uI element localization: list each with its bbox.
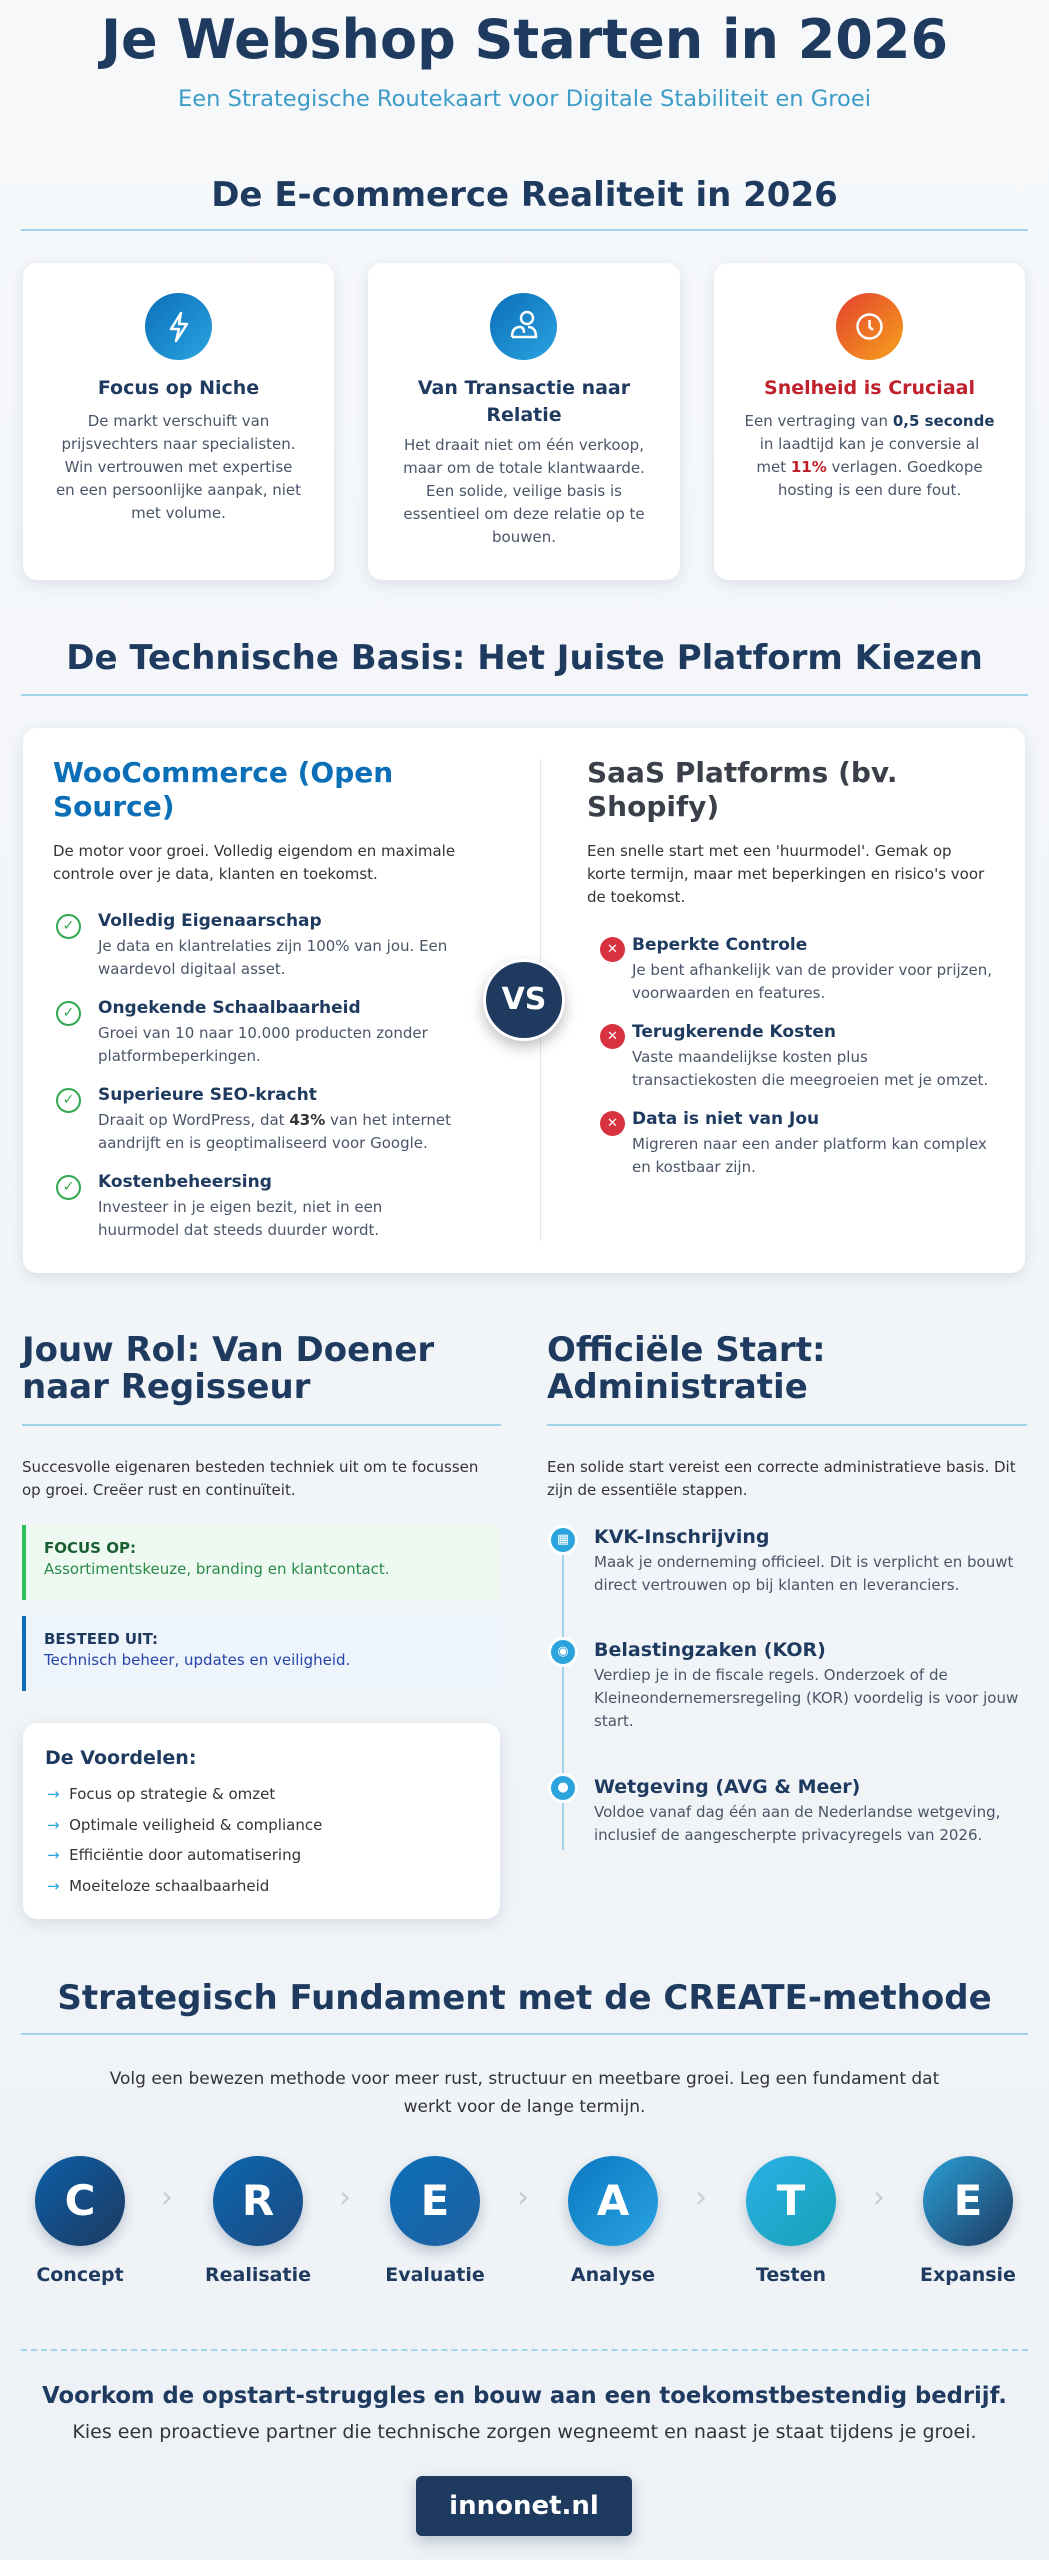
create steps: C	[65, 2176, 95, 2225]
create steps: R	[242, 2176, 274, 2225]
card: focus op niche	[23, 263, 334, 580]
timeline: Maak je onderneming officieel. Dit is verplicht en bouwt direct vertrouwen op bij klanten en leveranciers.	[594, 1553, 1013, 1594]
con items: Data is niet van Jou	[632, 1109, 819, 1129]
create steps: Analyse	[571, 2264, 655, 2286]
pro items: Kostenbeheersing	[98, 1172, 272, 1192]
vs badge: VS	[502, 982, 546, 1017]
box: besteed uit	[22, 1616, 501, 1691]
icon: clock	[836, 293, 903, 360]
timeline: KVK-Inschrijving	[594, 1526, 770, 1548]
card: voordelen: → Moeiteloze schaalbaarheid	[47, 1876, 269, 1894]
saas desc: korte termijn, maar met beperkingen en risico's voor	[587, 865, 984, 883]
create steps: ›	[161, 2180, 173, 2215]
create steps: Expansie	[920, 2264, 1016, 2286]
card text: Het draait niet om één verkoop, maar om de totale klantwaarde. Een solide, veilige basis is essentieel om deze relatie op te bouwen.	[403, 436, 645, 546]
title: Je Webshop Starten in 2026	[101, 8, 948, 71]
card: voordelen: De Voordelen:	[45, 1747, 196, 1769]
pro items: Draait op WordPress, dat 43% van het internet aandrijft en is geoptimaliseerd voor Google.	[98, 1111, 451, 1152]
vs badge	[483, 959, 565, 1041]
admin desc: Een solide start vereist een correcte administratieve basis. Dit zijn de essentiële stappen.	[547, 1458, 1016, 1499]
pro items: ✓	[63, 1092, 74, 1108]
heading: e-commerce realiteit: De E-commerce Realiteit in 2026	[211, 175, 838, 215]
create steps: ›	[339, 2180, 351, 2215]
pro items: Superieure SEO-kracht	[98, 1085, 317, 1105]
saas desc: Een snelle start met een 'huurmodel'. Gemak op	[587, 842, 952, 860]
pro items: Investeer in je eigen bezit, niet in een huurmodel dat steeds duurder wordt.	[98, 1198, 382, 1239]
create steps: ›	[873, 2180, 885, 2215]
pro items: Ongekende Schaalbaarheid	[98, 998, 361, 1018]
card: transactie naar relatie	[368, 263, 680, 580]
timeline: Belastingzaken (KOR)	[594, 1639, 826, 1661]
woocommerce desc: De motor voor groei. Volledig eigendom en maximale controle over je data, klanten en toekomst.	[53, 842, 455, 883]
cta heading: Voorkom de opstart-struggles en bouw aan een toekomstbestendig bedrijf.	[42, 2383, 1007, 2409]
box: besteed uit: Technisch beheer, updates en veiligheid.	[44, 1651, 350, 1669]
con items: ✕	[607, 1029, 618, 1044]
create steps: A	[597, 2176, 629, 2225]
saas desc: de toekomst.	[587, 888, 685, 906]
heading: officiële start: Officiële Start: Administratie	[547, 1330, 826, 1407]
cta text: Kies een proactieve partner die technische zorgen wegneemt en naast je staat tijdens je groei.	[72, 2421, 977, 2443]
create steps: Evaluatie	[385, 2264, 485, 2286]
timeline	[548, 1525, 1018, 1850]
card text: hosting is een dure fout.	[778, 481, 961, 499]
card: voordelen	[23, 1723, 500, 1919]
heading: technische basis: De Technische Basis: Het Juiste Platform Kiezen	[66, 638, 983, 678]
timeline: Verdiep je in de fiscale regels. Onderzoek of de Kleineondernemersregeling (KOR) voordelig is voor jouw start.	[594, 1666, 1018, 1730]
box: focus op	[22, 1525, 501, 1600]
create steps: E	[954, 2176, 982, 2225]
create steps: E	[421, 2176, 449, 2225]
subtitle: Een Strategische Routekaart voor Digitale Stabiliteit en Groei	[178, 86, 871, 112]
card title: Van Transactie naar Relatie	[418, 377, 630, 426]
woocommerce heading: WooCommerce (Open Source)	[53, 756, 393, 823]
timeline: ▦	[557, 1532, 569, 1547]
card: snelheid	[714, 263, 1025, 580]
create steps: ›	[517, 2180, 529, 2215]
pro items	[56, 911, 451, 1239]
panel: comparison	[23, 728, 1025, 1273]
pro items: Je data en klantrelaties zijn 100% van jou. Een waardevol digitaal asset.	[98, 937, 447, 978]
heading: create: Strategisch Fundament met de CREATE-methode	[57, 1978, 992, 2018]
con items: Beperkte Controle	[632, 935, 807, 955]
card: voordelen: → Optimale veiligheid & compliance	[47, 1816, 322, 1834]
pro items: ✓	[63, 1005, 74, 1021]
con items	[600, 935, 992, 1176]
card text: in laadtijd kan je conversie al	[760, 435, 979, 453]
create steps: ›	[695, 2180, 707, 2215]
pro items: Groei van 10 naar 10.000 producten zonder platformbeperkingen.	[98, 1024, 428, 1065]
con items: Vaste maandelijkse kosten plus	[632, 1048, 868, 1066]
create desc: Volg een bewezen methode voor meer rust, structuur en meetbare groei. Leg een fundament dat werkt voor de lange termijn.	[110, 2069, 939, 2117]
pro items: ✓	[63, 1179, 74, 1195]
create steps: Realisatie	[205, 2264, 311, 2286]
con items: ✕	[607, 1116, 618, 1131]
card title: Snelheid is Cruciaal	[764, 377, 975, 399]
card text: met 11% verlagen. Goedkope	[756, 458, 983, 476]
con items: Migreren naar een ander platform kan complex en kostbaar zijn.	[632, 1135, 987, 1176]
pro items: Volledig Eigenaarschap	[98, 911, 322, 931]
button: innonet.nl	[449, 2491, 599, 2521]
rol desc: Succesvolle eigenaren besteden techniek uit om te focussen op groei. Creëer rust en continuïteit.	[22, 1458, 478, 1499]
timeline: Voldoe vanaf dag één aan de Nederlandse wetgeving, inclusief de aangescherpte privacyregels van 2026.	[594, 1803, 1000, 1844]
card text: Een vertraging van 0,5 seconde	[744, 412, 994, 430]
create steps: Concept	[36, 2264, 124, 2286]
timeline: ●	[557, 1780, 569, 1795]
saas desc	[587, 842, 984, 906]
card: voordelen: → Focus op strategie & omzet	[47, 1785, 275, 1803]
icon: lightning	[145, 293, 212, 360]
timeline: ◉	[557, 1644, 569, 1659]
timeline: Wetgeving (AVG & Meer)	[594, 1776, 860, 1798]
heading: jouw rol: Jouw Rol: Van Doener naar Regisseur	[22, 1330, 434, 1407]
create steps: T	[777, 2176, 805, 2225]
button	[416, 2476, 632, 2536]
saas heading: SaaS Platforms (bv. Shopify)	[587, 756, 898, 823]
con items: Terugkerende Kosten	[632, 1022, 836, 1042]
card: voordelen: → Efficiëntie door automatisering	[47, 1846, 301, 1864]
box: focus op: Assortimentskeuze, branding en klantcontact.	[44, 1560, 390, 1578]
box: focus op: FOCUS OP:	[44, 1539, 136, 1557]
card text: De markt verschuift van prijsvechters naar specialisten. Win vertrouwen met expertise en een persoonlijke aanpak, niet met volume.	[56, 412, 301, 522]
card title: Focus op Niche	[98, 377, 259, 399]
create steps: Testen	[756, 2264, 826, 2286]
card text	[744, 412, 994, 499]
icon: person	[490, 293, 557, 360]
con items: Je bent afhankelijk van de provider voor prijzen, voorwaarden en features.	[632, 961, 992, 1002]
con items: ✕	[607, 942, 618, 957]
create steps	[30, 2156, 1018, 2286]
con items: transactiekosten die meegroeien met je omzet.	[632, 1071, 988, 1089]
pro items: ✓	[63, 918, 74, 934]
box: besteed uit: BESTEED UIT:	[44, 1630, 158, 1648]
